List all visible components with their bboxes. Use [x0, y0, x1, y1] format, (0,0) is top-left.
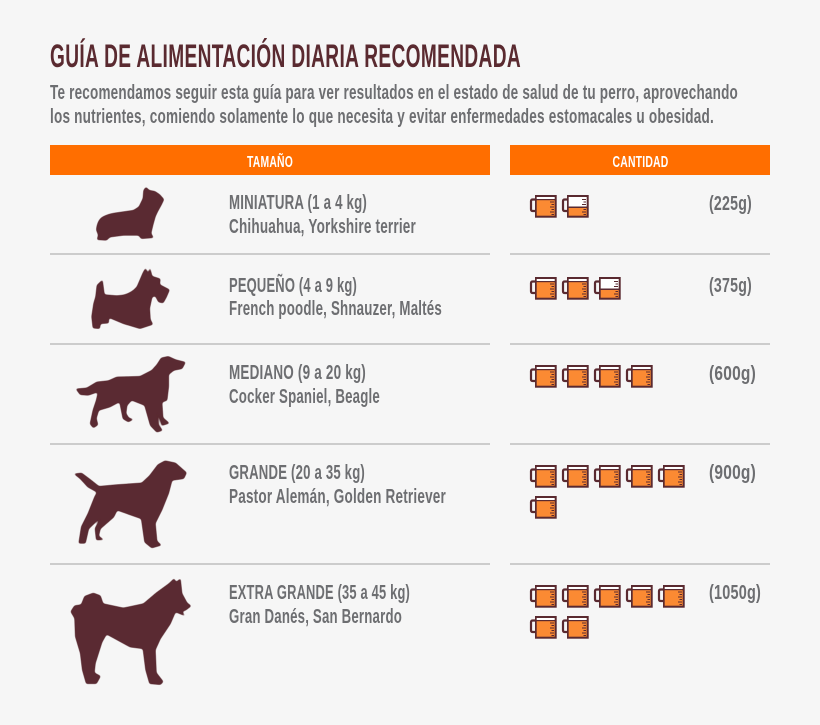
icon: spaniel silhouette: [75, 356, 186, 433]
label: miniatura: [229, 192, 416, 238]
icon: husky silhouette: [70, 578, 192, 685]
cups: 900g: [531, 462, 756, 519]
label: miniatura: Chihuahua, Yorkshire terrier: [229, 216, 416, 238]
cups: 600g: [531, 363, 756, 388]
label: mediano: Cocker Spaniel, Beagle: [229, 386, 380, 408]
header: cantidad: [510, 145, 770, 175]
row: extra grande: [70, 578, 761, 685]
cups: 600g: (600g): [709, 363, 756, 385]
row: grande: [73, 460, 756, 548]
label: grande: Pastor Alemán, Golden Retriever: [229, 486, 446, 508]
row: miniatura: [96, 187, 752, 241]
cups: 900g: (900g): [709, 462, 756, 484]
header: tamaño: [50, 145, 490, 175]
label: extra grande: EXTRA GRANDE (35 a 45 kg): [229, 582, 410, 604]
label: grande: GRANDE (20 a 35 kg): [229, 462, 365, 484]
intro text: [50, 82, 738, 128]
icon: yorkshire silhouette: [96, 187, 164, 241]
row: pequeño: [91, 267, 752, 329]
header: cantidad: CANTIDAD: [612, 154, 668, 171]
label: miniatura: MINIATURA (1 a 4 kg): [229, 192, 367, 214]
label: grande: [229, 462, 446, 508]
cups: 1050g: (1050g): [709, 582, 761, 604]
icon: retriever silhouette: [73, 460, 187, 548]
cups: 1050g: [531, 582, 761, 639]
header: tamaño: TAMAÑO: [247, 151, 293, 171]
label: mediano: [229, 362, 380, 408]
label: pequeño: French poodle, Shnauzer, Maltés: [229, 298, 442, 320]
label: pequeño: [229, 274, 442, 320]
cups: 375g: [531, 275, 752, 300]
cups: 375g: (375g): [709, 275, 752, 297]
row: mediano: [75, 356, 756, 433]
label: pequeño: PEQUEÑO (4 a 9 kg): [229, 274, 357, 297]
cups: 225g: (225g): [709, 193, 752, 215]
label: extra grande: Gran Danés, San Bernardo: [229, 606, 402, 628]
icon: terrier silhouette: [91, 267, 170, 329]
label: mediano: MEDIANO (9 a 20 kg): [229, 362, 366, 384]
title: GUÍA DE ALIMENTACIÓN DIARIA RECOMENDADA: [50, 38, 521, 74]
label: extra grande: [229, 582, 410, 628]
cups: 225g: [531, 193, 752, 218]
